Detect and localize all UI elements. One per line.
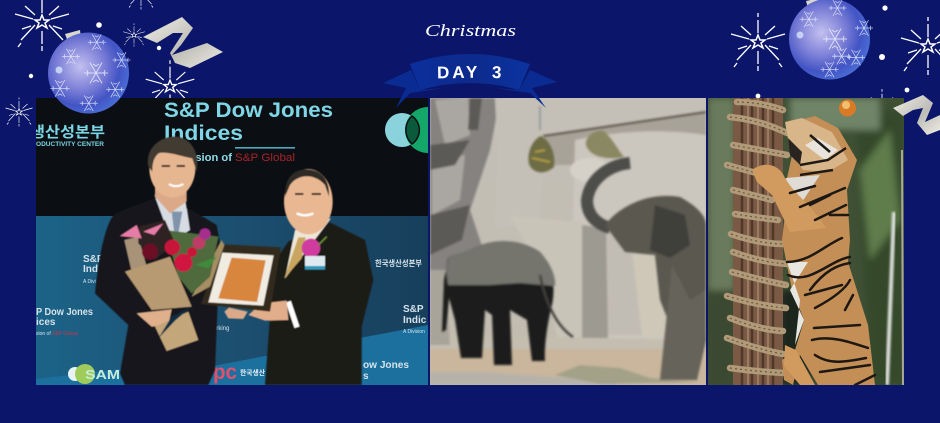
title: Christmas: Christmas	[425, 21, 516, 40]
stage text: 한국생산	[240, 368, 266, 377]
ribbon: silver right	[893, 95, 940, 135]
ornament: right	[789, 0, 873, 80]
small elephant	[442, 241, 573, 365]
fireworks and dots	[6, 0, 940, 127]
man left	[95, 137, 220, 385]
stage text: pc	[213, 361, 237, 384]
stage text: S&P Dow Jones	[164, 99, 333, 122]
tiger body	[752, 116, 875, 385]
stage text	[30, 99, 427, 384]
ornament: left	[48, 30, 130, 114]
stage text: S&P	[83, 254, 104, 265]
stage text: S&P	[403, 304, 424, 315]
stage text: A Divi	[83, 279, 96, 285]
framed certificate	[201, 244, 281, 319]
stage text: ODUCTIVITY CENTER	[36, 141, 104, 148]
photo: award ceremony	[30, 98, 451, 385]
stage text: 한국생산성본부	[375, 258, 423, 268]
stage text: P Dow Jones	[36, 307, 93, 318]
stage text: SAM	[85, 367, 120, 382]
banner: DAY 3	[383, 54, 557, 108]
stage text: sion of S&P Global	[36, 331, 78, 337]
banner: DAY 3: 3	[492, 63, 502, 82]
stage text: Indic	[403, 315, 427, 326]
logo circles	[385, 107, 428, 153]
stage text: ow Jones	[363, 360, 409, 371]
stage text: vision of	[186, 152, 232, 164]
photo: tiger	[708, 98, 904, 385]
stage text: arking	[213, 326, 229, 332]
orange ornament	[839, 100, 856, 116]
stage text: s	[363, 371, 369, 382]
stage text: Ind	[83, 264, 98, 275]
bouquet	[120, 220, 224, 351]
banner: DAY 3: DAY	[437, 63, 481, 82]
feed nets	[528, 106, 624, 172]
stage text: S&P Global	[235, 152, 295, 164]
ribbon: silver left	[143, 17, 223, 68]
stage text: Indices	[164, 122, 243, 145]
big elephant	[587, 163, 706, 380]
tree trunk with ropes	[727, 98, 787, 385]
photo: elephants	[430, 98, 706, 385]
stage text: ices	[36, 317, 56, 328]
stage text: 생산성본부	[30, 124, 105, 141]
man right	[248, 169, 373, 385]
stage text: A Division	[403, 329, 425, 335]
